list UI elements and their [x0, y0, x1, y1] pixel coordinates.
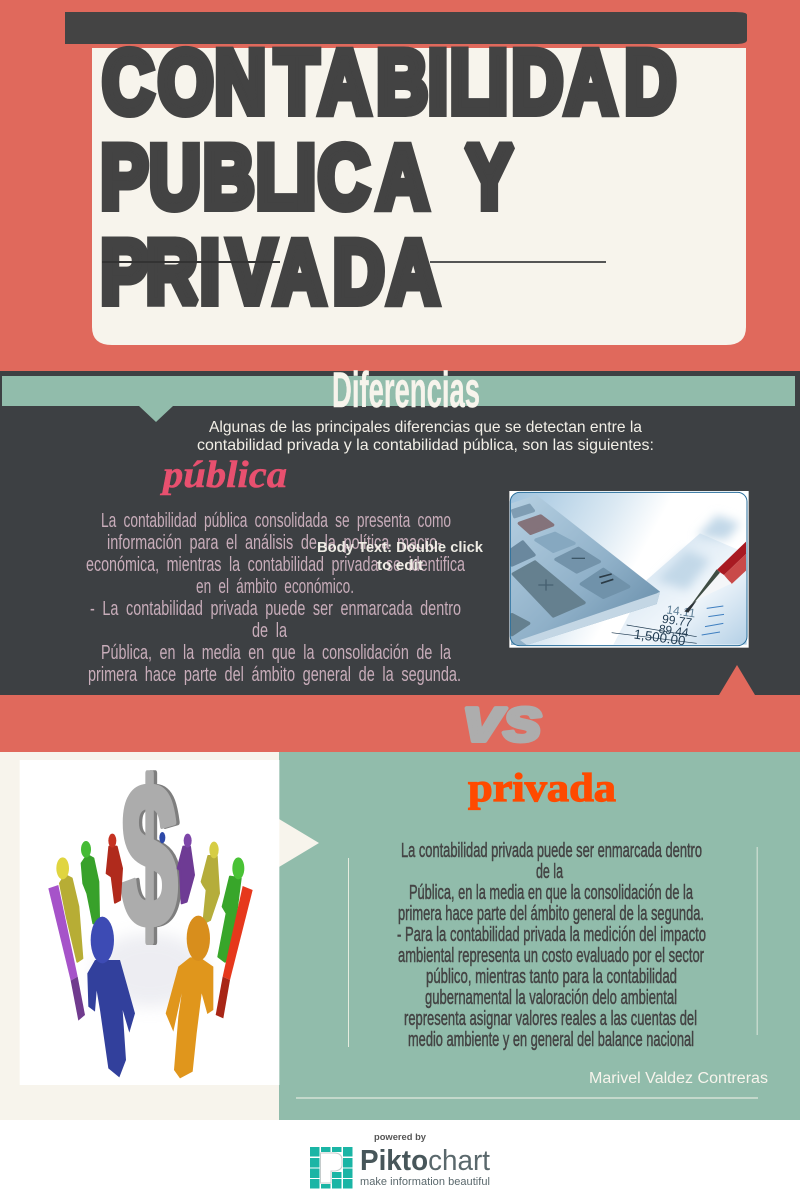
body text: pública: [86, 510, 466, 686]
bottom rule: [296, 1097, 758, 1099]
panel: title card: [92, 48, 746, 345]
piktochart wordmark: Piktochart: [360, 1145, 490, 1177]
dark header bar: [65, 12, 747, 44]
vs label: vs: [463, 686, 543, 755]
heading: privada: privada: [468, 765, 616, 810]
body text: pública: en el ámbito económico.: [196, 576, 354, 598]
panel: privada background: [279, 752, 800, 1120]
intro text: contabilidad privada y la contabilidad pública, son las siguientes:: [197, 437, 654, 454]
header background: [0, 0, 800, 372]
body text: pública: económica, mientras la contabilidad privada se identifica: [86, 554, 466, 576]
title: [101, 33, 676, 322]
intro text: Algunas de las principales diferencias que se detectan entre la: [209, 419, 642, 436]
powered by: powered by: [374, 1132, 427, 1143]
body text: pública: primera hace parte del ámbito general de la segunda.: [88, 664, 461, 686]
picture: calculator and pen: 14.11: [666, 602, 697, 620]
body text: privada: [397, 840, 706, 1051]
tagline: make information beautiful: [360, 1176, 490, 1188]
body text: pública: Pública, en la media en que la consolidación de la: [101, 642, 452, 664]
title: PRIVADA: [101, 223, 439, 322]
picture: people around a dollar sign: $: [124, 739, 181, 971]
pointer to privada: [279, 819, 319, 867]
body text: pública: información para el análisis de la política macro-: [107, 532, 442, 554]
body text: privada: de la: [536, 861, 564, 883]
placeholder text overlay: to edit: [377, 557, 423, 574]
body text: privada: público, mientras tanto para la contabilidad: [426, 966, 677, 988]
band pointer: [139, 406, 173, 422]
picture: calculator and pen: 1,500.00: [633, 626, 686, 649]
icon: piktochart logo: [310, 1147, 352, 1188]
title: PUBLICA Y: [101, 128, 513, 227]
body text: pública: La contabilidad pública consolidada se presenta como: [101, 510, 451, 532]
title rule right: [430, 261, 606, 263]
right rule: [756, 847, 758, 1035]
coral vs band: [0, 695, 800, 752]
footer: [0, 1120, 800, 1200]
body text: pública: - La contabilidad privada puede ser enmarcada dentro: [90, 598, 461, 620]
heading band: [2, 376, 795, 406]
picture: calculator and pen: 89.44: [658, 622, 690, 640]
heading: pública: pública: [160, 454, 287, 496]
picture: people around a dollar sign: [20, 739, 279, 1085]
heading: diferencias: Diferencias: [332, 362, 480, 418]
picture: calculator and pen: [509, 491, 749, 649]
band pointer up: [719, 665, 755, 695]
title rule left: [102, 261, 280, 263]
panel: diferencias: [0, 362, 800, 696]
left rule: [348, 858, 349, 1047]
title: CONTABILIDAD: [102, 33, 676, 132]
picture: people around a dollar sign: $: [121, 739, 178, 971]
panel: people image background: [0, 752, 279, 1120]
placeholder text overlay: Body Text: Double click: [317, 539, 484, 556]
picture: calculator and pen: 99.77: [661, 612, 693, 630]
intro text: [197, 419, 654, 454]
author: Marivel Valdez Contreras: [589, 1070, 768, 1087]
placeholder text overlay: [317, 539, 484, 574]
body text: pública: de la: [252, 620, 288, 642]
